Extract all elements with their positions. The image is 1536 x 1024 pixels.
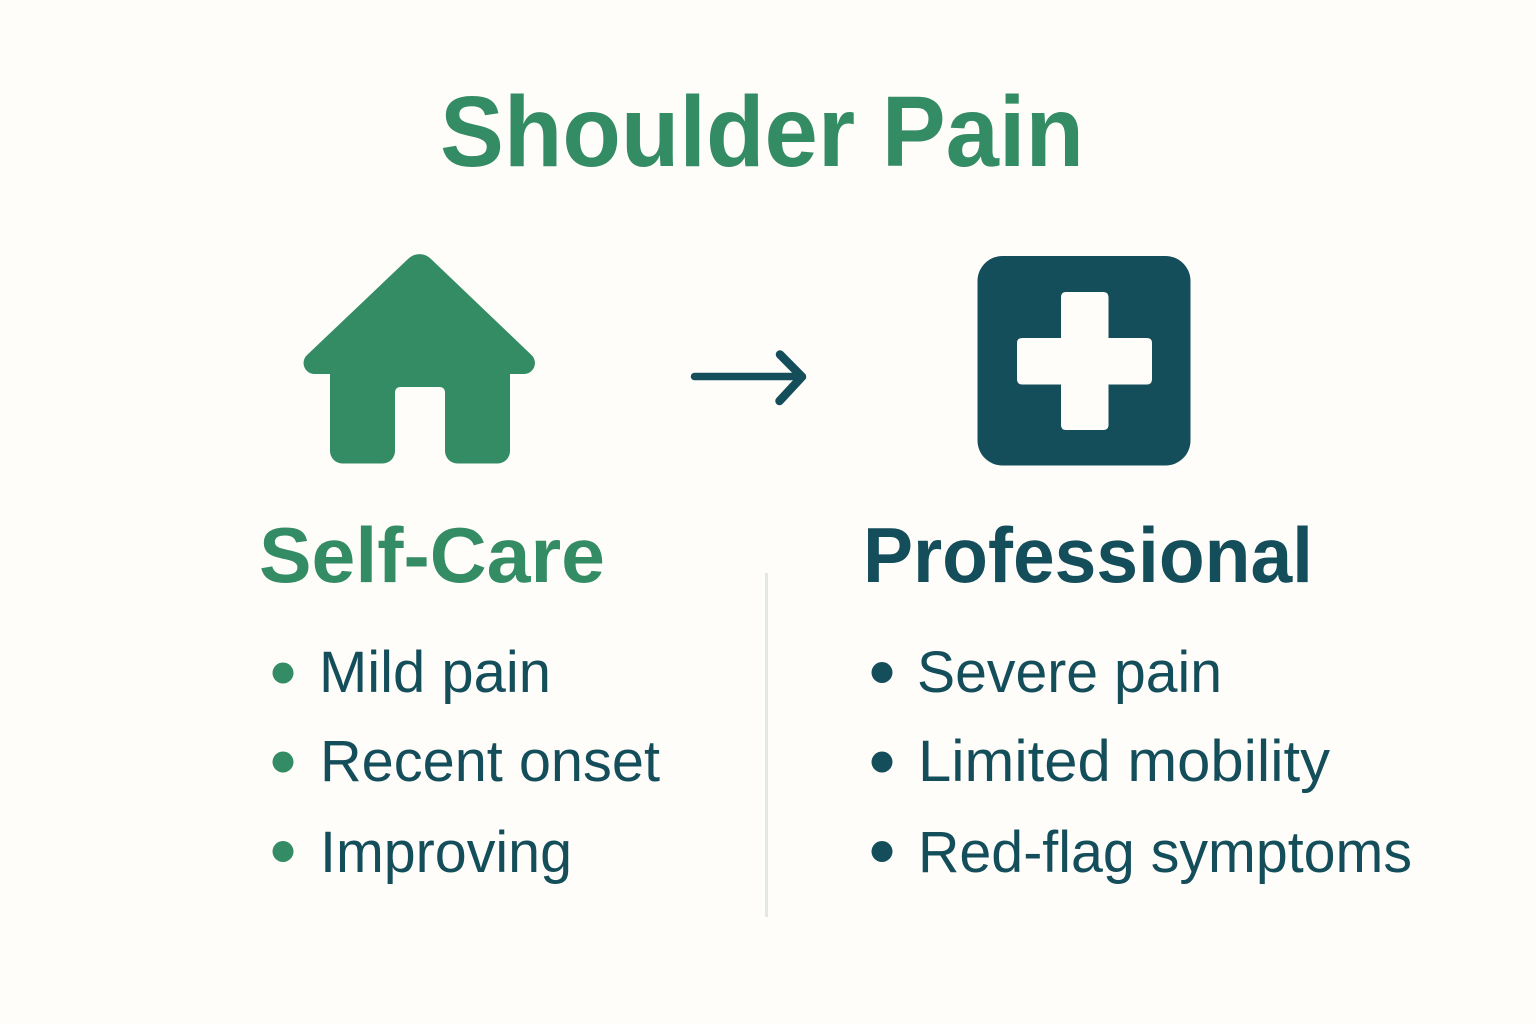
heading: self-care: Self-Care	[259, 511, 605, 599]
list: self-care criteria	[272, 640, 660, 885]
panel: professional	[863, 511, 1412, 885]
list: professional criteria: Limited mobility	[918, 729, 1330, 794]
heading: professional: Professional	[863, 511, 1313, 599]
divider	[765, 573, 768, 917]
list: professional criteria: Severe pain	[917, 640, 1222, 705]
list: self-care criteria: Mild pain	[319, 640, 551, 705]
panel: self-care	[259, 511, 660, 885]
icon: medical cross	[978, 256, 1190, 466]
list: professional criteria	[872, 640, 1412, 885]
list: professional criteria: Red-flag symptoms	[918, 820, 1412, 885]
list: self-care criteria: Recent onset	[320, 729, 660, 794]
arrow	[694, 354, 802, 401]
icon: house	[304, 254, 535, 464]
title: Shoulder Pain	[440, 76, 1084, 188]
list: self-care criteria: Improving	[320, 820, 572, 885]
